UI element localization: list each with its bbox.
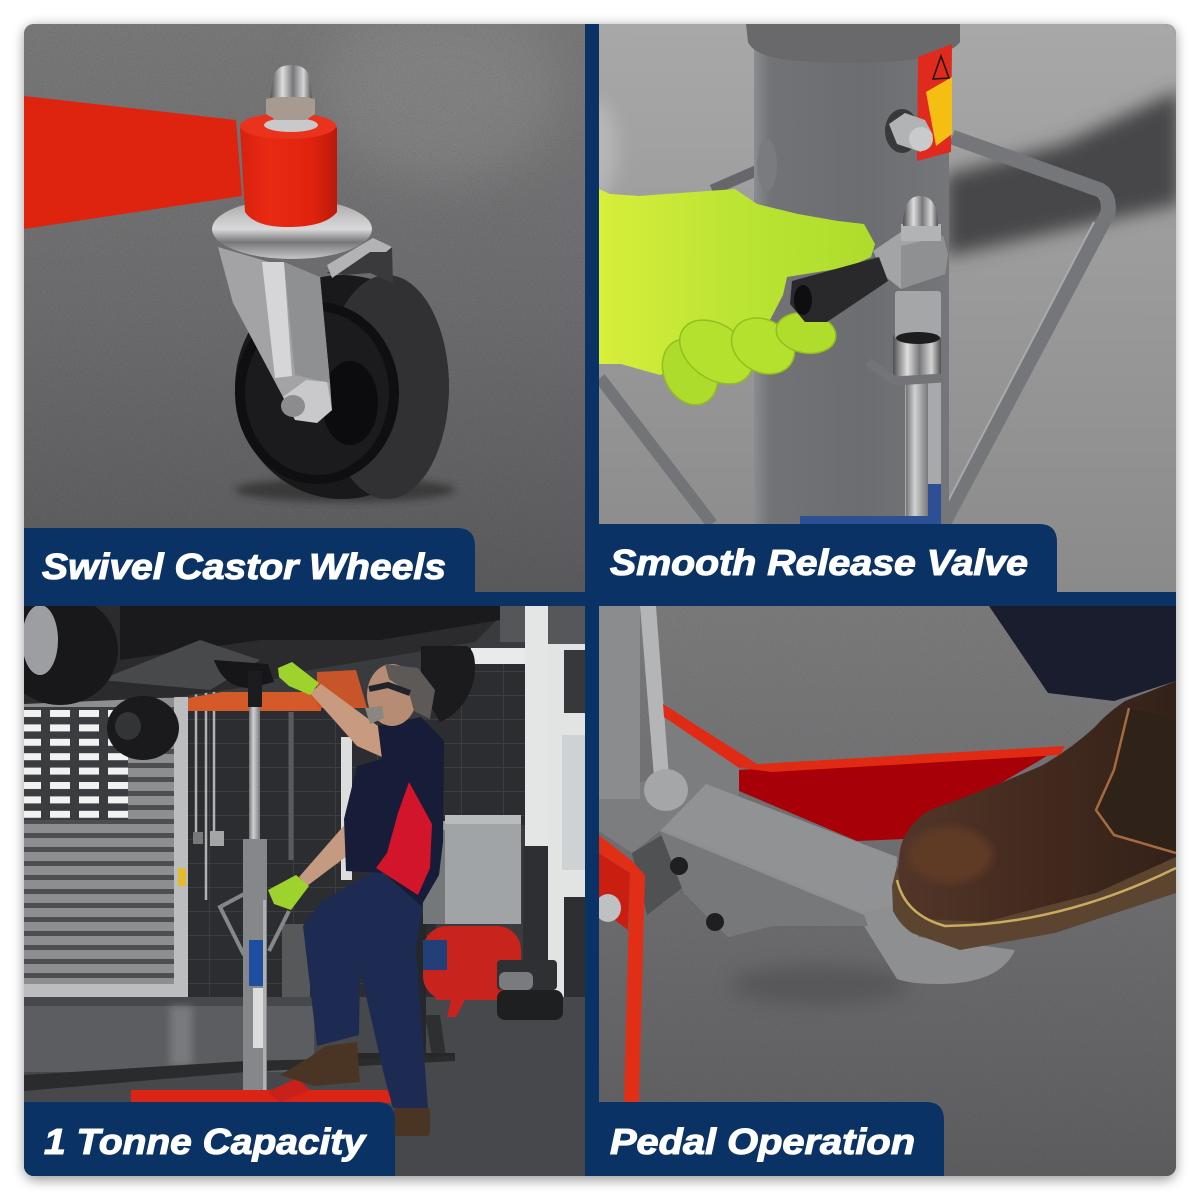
jack column	[599, 606, 640, 799]
roller shutter	[24, 697, 188, 1006]
red rear plate	[663, 704, 1065, 841]
panel: 1 tonne capacity	[2, 595, 585, 1176]
tab: pedal operation: Pedal Operation	[610, 1121, 915, 1162]
crate	[282, 924, 310, 997]
orange cradle	[188, 660, 367, 711]
panel: smooth release valve	[573, 24, 1180, 592]
grey pedal	[660, 784, 1015, 984]
wall pipes	[196, 692, 214, 900]
tab: smooth release valve	[585, 524, 1057, 592]
work boot	[892, 681, 1176, 950]
panel: pedal operation	[595, 606, 1176, 1176]
door frame	[523, 606, 585, 1017]
chrome cap nut	[264, 65, 318, 132]
grey base	[599, 717, 739, 853]
inner rod and blue tube	[800, 376, 941, 524]
mechanic	[268, 662, 444, 1136]
tab: smooth release valve: Smooth Release Valve	[610, 542, 1028, 583]
white strip and pillars	[471, 648, 525, 664]
raised glove	[278, 662, 319, 695]
block walls	[186, 700, 346, 998]
floor	[599, 606, 1176, 1176]
hair	[385, 664, 435, 719]
tab: 1 tonne capacity: 1 Tonne Capacity	[44, 1121, 367, 1162]
lower glove	[268, 875, 309, 910]
floor ramp plate	[24, 1060, 452, 1091]
trouser leg	[989, 606, 1176, 701]
axle bolt	[281, 380, 332, 423]
collar	[746, 24, 960, 63]
shirt	[344, 717, 444, 906]
red arm	[24, 96, 242, 229]
red front bracket	[595, 835, 645, 1102]
lower arm	[299, 821, 351, 886]
safety glasses	[369, 685, 410, 693]
bracket flange	[757, 141, 776, 188]
fork	[218, 238, 393, 423]
work trousers	[303, 870, 428, 1108]
raised arm	[310, 684, 382, 757]
red compressor	[423, 926, 521, 1017]
garage floor	[24, 997, 585, 1176]
chrome rod	[640, 606, 669, 777]
floor	[24, 24, 585, 592]
beard	[365, 706, 384, 724]
lift post behind	[357, 915, 455, 1061]
warning label	[917, 44, 952, 161]
panel: swivel castor wheels	[24, 0, 585, 592]
chrome plate	[212, 199, 372, 259]
blurred dark band	[945, 90, 1180, 257]
frame tubes	[600, 137, 1108, 524]
red cylinder	[240, 113, 337, 227]
finger: ring	[679, 319, 752, 385]
black handle	[790, 257, 888, 322]
finger: index	[776, 312, 836, 354]
upper wall	[178, 620, 525, 960]
grey pole	[754, 24, 949, 524]
valve assembly	[868, 196, 948, 381]
finger: middle	[730, 317, 796, 375]
head	[367, 664, 417, 726]
tab: pedal operation	[585, 1102, 944, 1176]
neon glove	[599, 189, 875, 414]
rod nut	[644, 769, 688, 811]
grey cabinet	[423, 815, 521, 924]
tab: 1 tonne capacity	[24, 1102, 395, 1176]
bolt	[885, 109, 933, 153]
car underside	[2, 595, 500, 760]
raised boot	[280, 1042, 360, 1086]
small compressor	[497, 960, 563, 1020]
castor wheel	[235, 275, 449, 499]
tab: swivel castor wheels: Swivel Castor Wheels	[42, 546, 446, 587]
tab: swivel castor wheels	[24, 528, 475, 592]
background	[599, 24, 1176, 592]
standing boot	[394, 1108, 430, 1136]
shirt red panel	[376, 782, 432, 895]
jack column	[131, 671, 391, 1103]
finger: little	[662, 339, 718, 406]
